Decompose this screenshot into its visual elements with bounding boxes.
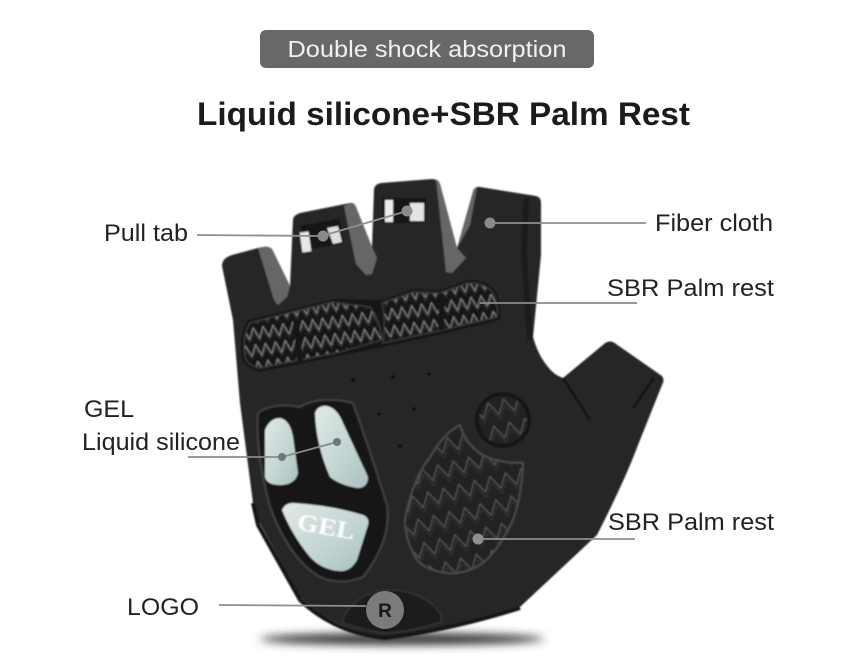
gel pad small left [265, 418, 298, 485]
gel pad large [282, 503, 368, 571]
label: SBR Palm rest bottom: SBR Palm rest [608, 509, 774, 536]
badge: Double shock absorption: Double shock absorption [288, 36, 566, 62]
leader: SBR Palm rest top [480, 302, 637, 304]
ventilation holes [351, 372, 431, 448]
label: SBR Palm rest top: SBR Palm rest [607, 275, 774, 302]
finger side panels [258, 180, 477, 305]
leader: Liquid silicone [188, 438, 341, 461]
leader: SBR Palm rest bottom [472, 534, 635, 544]
leader: LOGO [219, 605, 366, 606]
leader: Fiber cloth [484, 218, 646, 228]
palm pad group right [382, 283, 498, 343]
logo badge [366, 591, 404, 629]
label: LOGO: LOGO [127, 594, 199, 621]
label: Liquid silicone: Liquid silicone [82, 429, 240, 456]
label: Pull tab: Pull tab [104, 220, 188, 247]
ground shadow [260, 633, 544, 645]
index seam [524, 198, 530, 340]
pull tab right [382, 198, 426, 223]
label: GEL: GEL [84, 396, 134, 423]
palm pad shadow [241, 280, 500, 372]
thumb pad small [477, 394, 529, 446]
gel pad border [258, 400, 388, 582]
thumb pad large [405, 425, 523, 573]
badge: Double shock absorption [260, 30, 594, 68]
bottom hem [253, 503, 520, 638]
logo patch [342, 590, 441, 633]
palm pad group left [244, 302, 382, 368]
glove illustration [222, 179, 664, 638]
leader: Pull tab [197, 206, 412, 242]
thumb seam [563, 378, 654, 420]
label: Fiber cloth: Fiber cloth [655, 210, 773, 237]
pull tab left [300, 219, 344, 252]
title: Liquid silicone+SBR Palm Rest [197, 96, 690, 132]
pad separators [296, 294, 442, 362]
GEL lettering: GEL [295, 510, 357, 545]
glove body [222, 179, 664, 637]
gel pad small right [315, 406, 368, 488]
logo badge: R [378, 601, 392, 622]
